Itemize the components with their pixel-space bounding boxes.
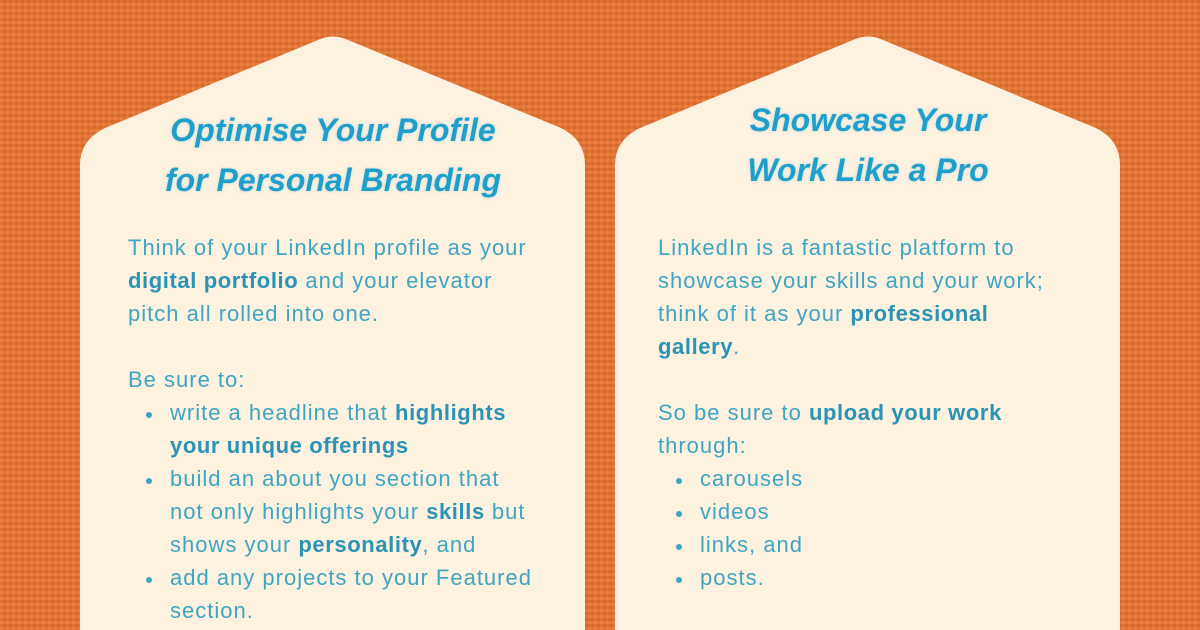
text block: showcase: through:	[658, 433, 747, 458]
text block: showcase	[658, 235, 1044, 590]
heading: showcase: Showcase Your	[750, 102, 986, 138]
text block: intro: build an about you section that	[170, 466, 499, 491]
text block: showcase: videos	[700, 499, 770, 524]
text block: showcase: showcase your skills and your work;	[658, 268, 1044, 293]
text block: showcase: posts.	[700, 565, 765, 590]
text block: intro: Be sure to:	[128, 367, 245, 392]
text block: showcase: think of it as your professional	[658, 301, 988, 326]
heading line 2: for Personal Branding	[165, 162, 501, 198]
text block: intro: pitch all rolled into one.	[128, 301, 379, 326]
heading: profile: Optimise Your Profile	[170, 112, 496, 148]
text block: intro: write a headline that highlights	[170, 400, 506, 425]
text block: intro: digital portfolio and your elevator	[128, 268, 492, 293]
heading line 2: Work Like a Pro	[747, 152, 989, 188]
panel: profile	[128, 112, 532, 623]
text block: intro: Think of your LinkedIn profile as your	[128, 235, 527, 260]
text block: intro: not only highlights your skills but	[170, 499, 526, 524]
panel: showcase	[658, 102, 1044, 590]
text block: showcase: So be sure to upload your work	[658, 400, 1002, 425]
text block: showcase: links, and	[700, 532, 803, 557]
text block: intro	[128, 235, 532, 623]
text block: intro: add any projects to your Featured	[170, 565, 532, 590]
text block: showcase: gallery.	[658, 334, 740, 359]
text block: intro: your unique offerings	[170, 433, 409, 458]
text block: intro: section.	[170, 598, 254, 623]
text block: intro: shows your personality, and	[170, 532, 476, 557]
text block: showcase: LinkedIn is a fantastic platform to	[658, 235, 1015, 260]
text block: showcase: carousels	[700, 466, 803, 491]
